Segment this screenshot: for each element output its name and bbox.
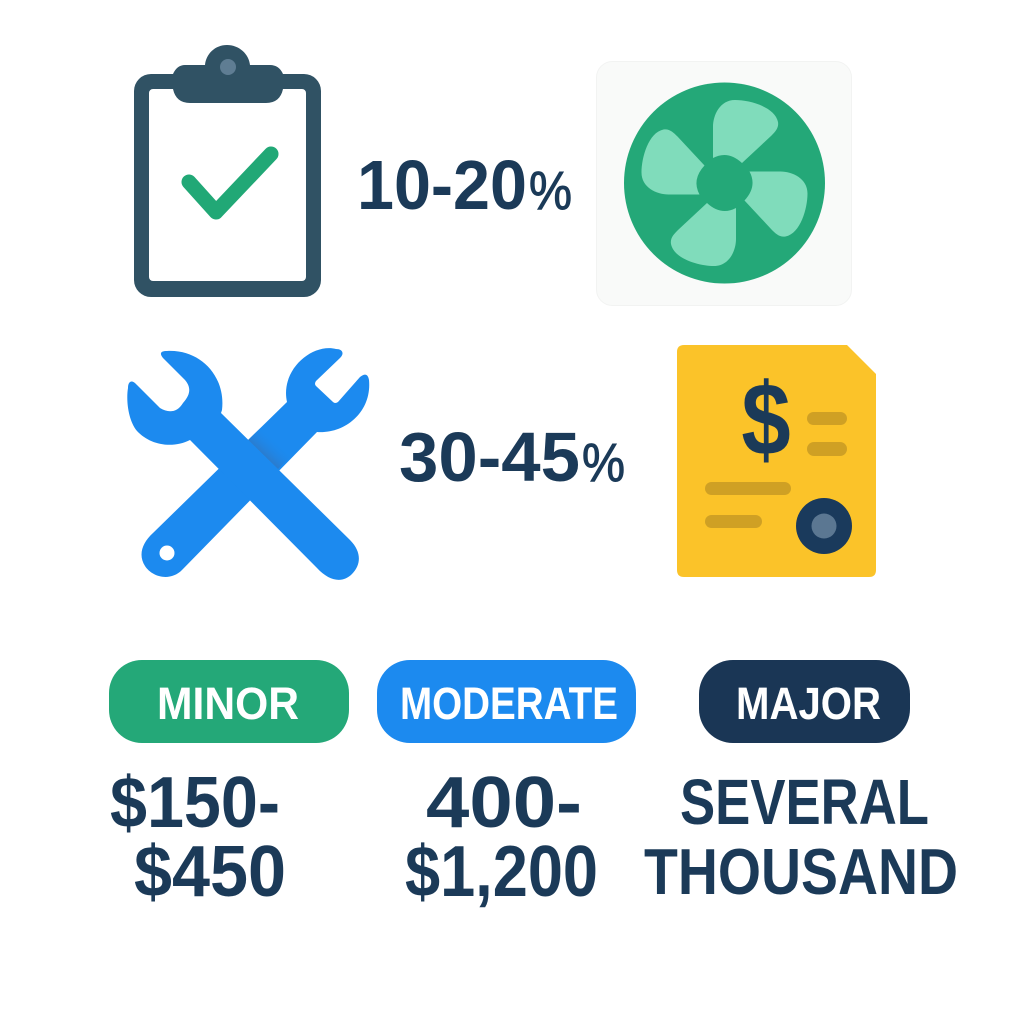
cost: major: SEVERAL [680,766,929,838]
badge: moderate [377,660,636,743]
right wrench [142,348,369,577]
badge: minor [109,660,349,743]
stat: 10-20%: % [529,161,572,221]
icon: clipboard with check [134,45,321,297]
clipboard board [134,74,321,297]
icon: fan [596,62,852,306]
cost: minor: $450 [134,832,286,912]
cost: moderate: 400- [426,763,582,843]
badge: major: MAJOR [736,678,881,729]
cost: minor [110,763,286,912]
stat: 30-45%: % [582,433,625,493]
fan blades [642,100,808,266]
cost: moderate [405,763,598,912]
icon: invoice document: $ [741,363,791,478]
stat: 10-20%: 10-20 [357,146,527,224]
badge: major [699,660,910,743]
cost: minor: $150- [110,763,280,843]
stat: 30-45%: 30-45 [399,418,580,496]
left wrench [127,351,359,580]
badge: moderate: MODERATE [400,678,618,729]
icon: crossed wrenches [127,348,369,580]
cost: moderate: $1,200 [405,832,598,912]
clipboard clip [173,45,283,103]
check mark [189,154,271,212]
badge: minor: MINOR [157,678,299,729]
cost: major: THOUSAND [644,835,958,908]
icon: invoice document [677,345,876,577]
cost: major [644,766,958,908]
